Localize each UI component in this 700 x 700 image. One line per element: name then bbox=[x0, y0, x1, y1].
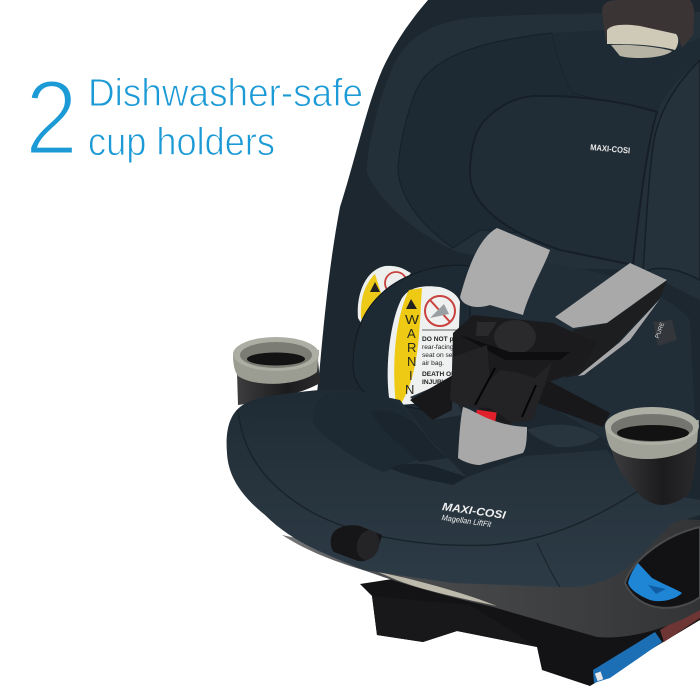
shoulder pad behind label bbox=[353, 265, 470, 420]
warning label front: A bbox=[407, 326, 416, 341]
warning label front: W bbox=[405, 312, 420, 327]
warning label front: N bbox=[407, 354, 416, 369]
warning label front: air bag. bbox=[422, 360, 444, 367]
base label bbox=[593, 632, 662, 683]
cup holder right bbox=[605, 407, 699, 505]
cushion front fold bbox=[238, 410, 640, 545]
warning label front: rear-facing bbox=[422, 344, 454, 351]
heading text: cup holders bbox=[88, 121, 275, 164]
lap belts bbox=[410, 375, 610, 427]
cushion inner pad bbox=[313, 392, 432, 472]
warning label front bbox=[388, 286, 467, 405]
crotch strap pad bbox=[458, 407, 527, 465]
headrest wing bbox=[367, 12, 700, 300]
crotch pad bbox=[371, 411, 448, 462]
crotch flap bbox=[390, 464, 467, 485]
knob on cushion bbox=[331, 525, 383, 562]
warning label front: N bbox=[405, 382, 414, 397]
cup holder left bbox=[233, 337, 320, 405]
upper right panel bbox=[552, 30, 700, 112]
seat back bbox=[312, 0, 700, 520]
shoulder strap right bbox=[555, 263, 667, 378]
headrest handle bbox=[602, 0, 694, 58]
lower panel bbox=[450, 262, 695, 450]
shoulder strap left bbox=[460, 228, 550, 315]
warning label front: INJURY c bbox=[422, 379, 452, 386]
harness buckle bbox=[450, 345, 552, 423]
rear cushion area bbox=[420, 400, 607, 477]
heading bbox=[25, 59, 363, 177]
seat shell bbox=[282, 500, 700, 637]
belt path opening bbox=[625, 527, 700, 608]
car seat bbox=[227, 0, 700, 686]
logo: Magellan LiftFit bbox=[440, 501, 507, 531]
blue lever bbox=[628, 563, 682, 601]
warning label front: R bbox=[407, 340, 416, 355]
PURE badge bbox=[653, 320, 677, 346]
logo: MAXI-COSI on headrest: MAXI-COSI bbox=[590, 142, 631, 155]
recess around the insert bbox=[398, 33, 640, 248]
hip pads bbox=[410, 380, 600, 447]
warning label front: DEATH OR SE bbox=[422, 371, 467, 378]
red buckle release bbox=[475, 410, 497, 422]
logo: Magellan LiftFit: Magellan LiftFit bbox=[441, 513, 493, 529]
harness chest clip bbox=[452, 315, 597, 425]
lower back area bbox=[323, 222, 700, 520]
warning label behind bbox=[358, 266, 411, 330]
warning label front: DO NOT plac bbox=[422, 336, 463, 343]
warning label front: I bbox=[409, 368, 413, 383]
heading text: Dishwasher-safe bbox=[88, 72, 363, 115]
headrest side wing bbox=[643, 60, 700, 280]
seat cushion bbox=[227, 389, 700, 587]
PURE badge: PURE bbox=[655, 322, 666, 339]
warning label front: seat on seat bbox=[422, 352, 458, 359]
numeral 2: 2 bbox=[25, 59, 78, 177]
base bbox=[360, 560, 700, 686]
head insert pad bbox=[470, 96, 657, 265]
logo: Magellan LiftFit: MAXI-COSI bbox=[441, 501, 507, 522]
beige strip under the seat bbox=[378, 572, 497, 606]
cushion side seam bbox=[537, 543, 560, 587]
